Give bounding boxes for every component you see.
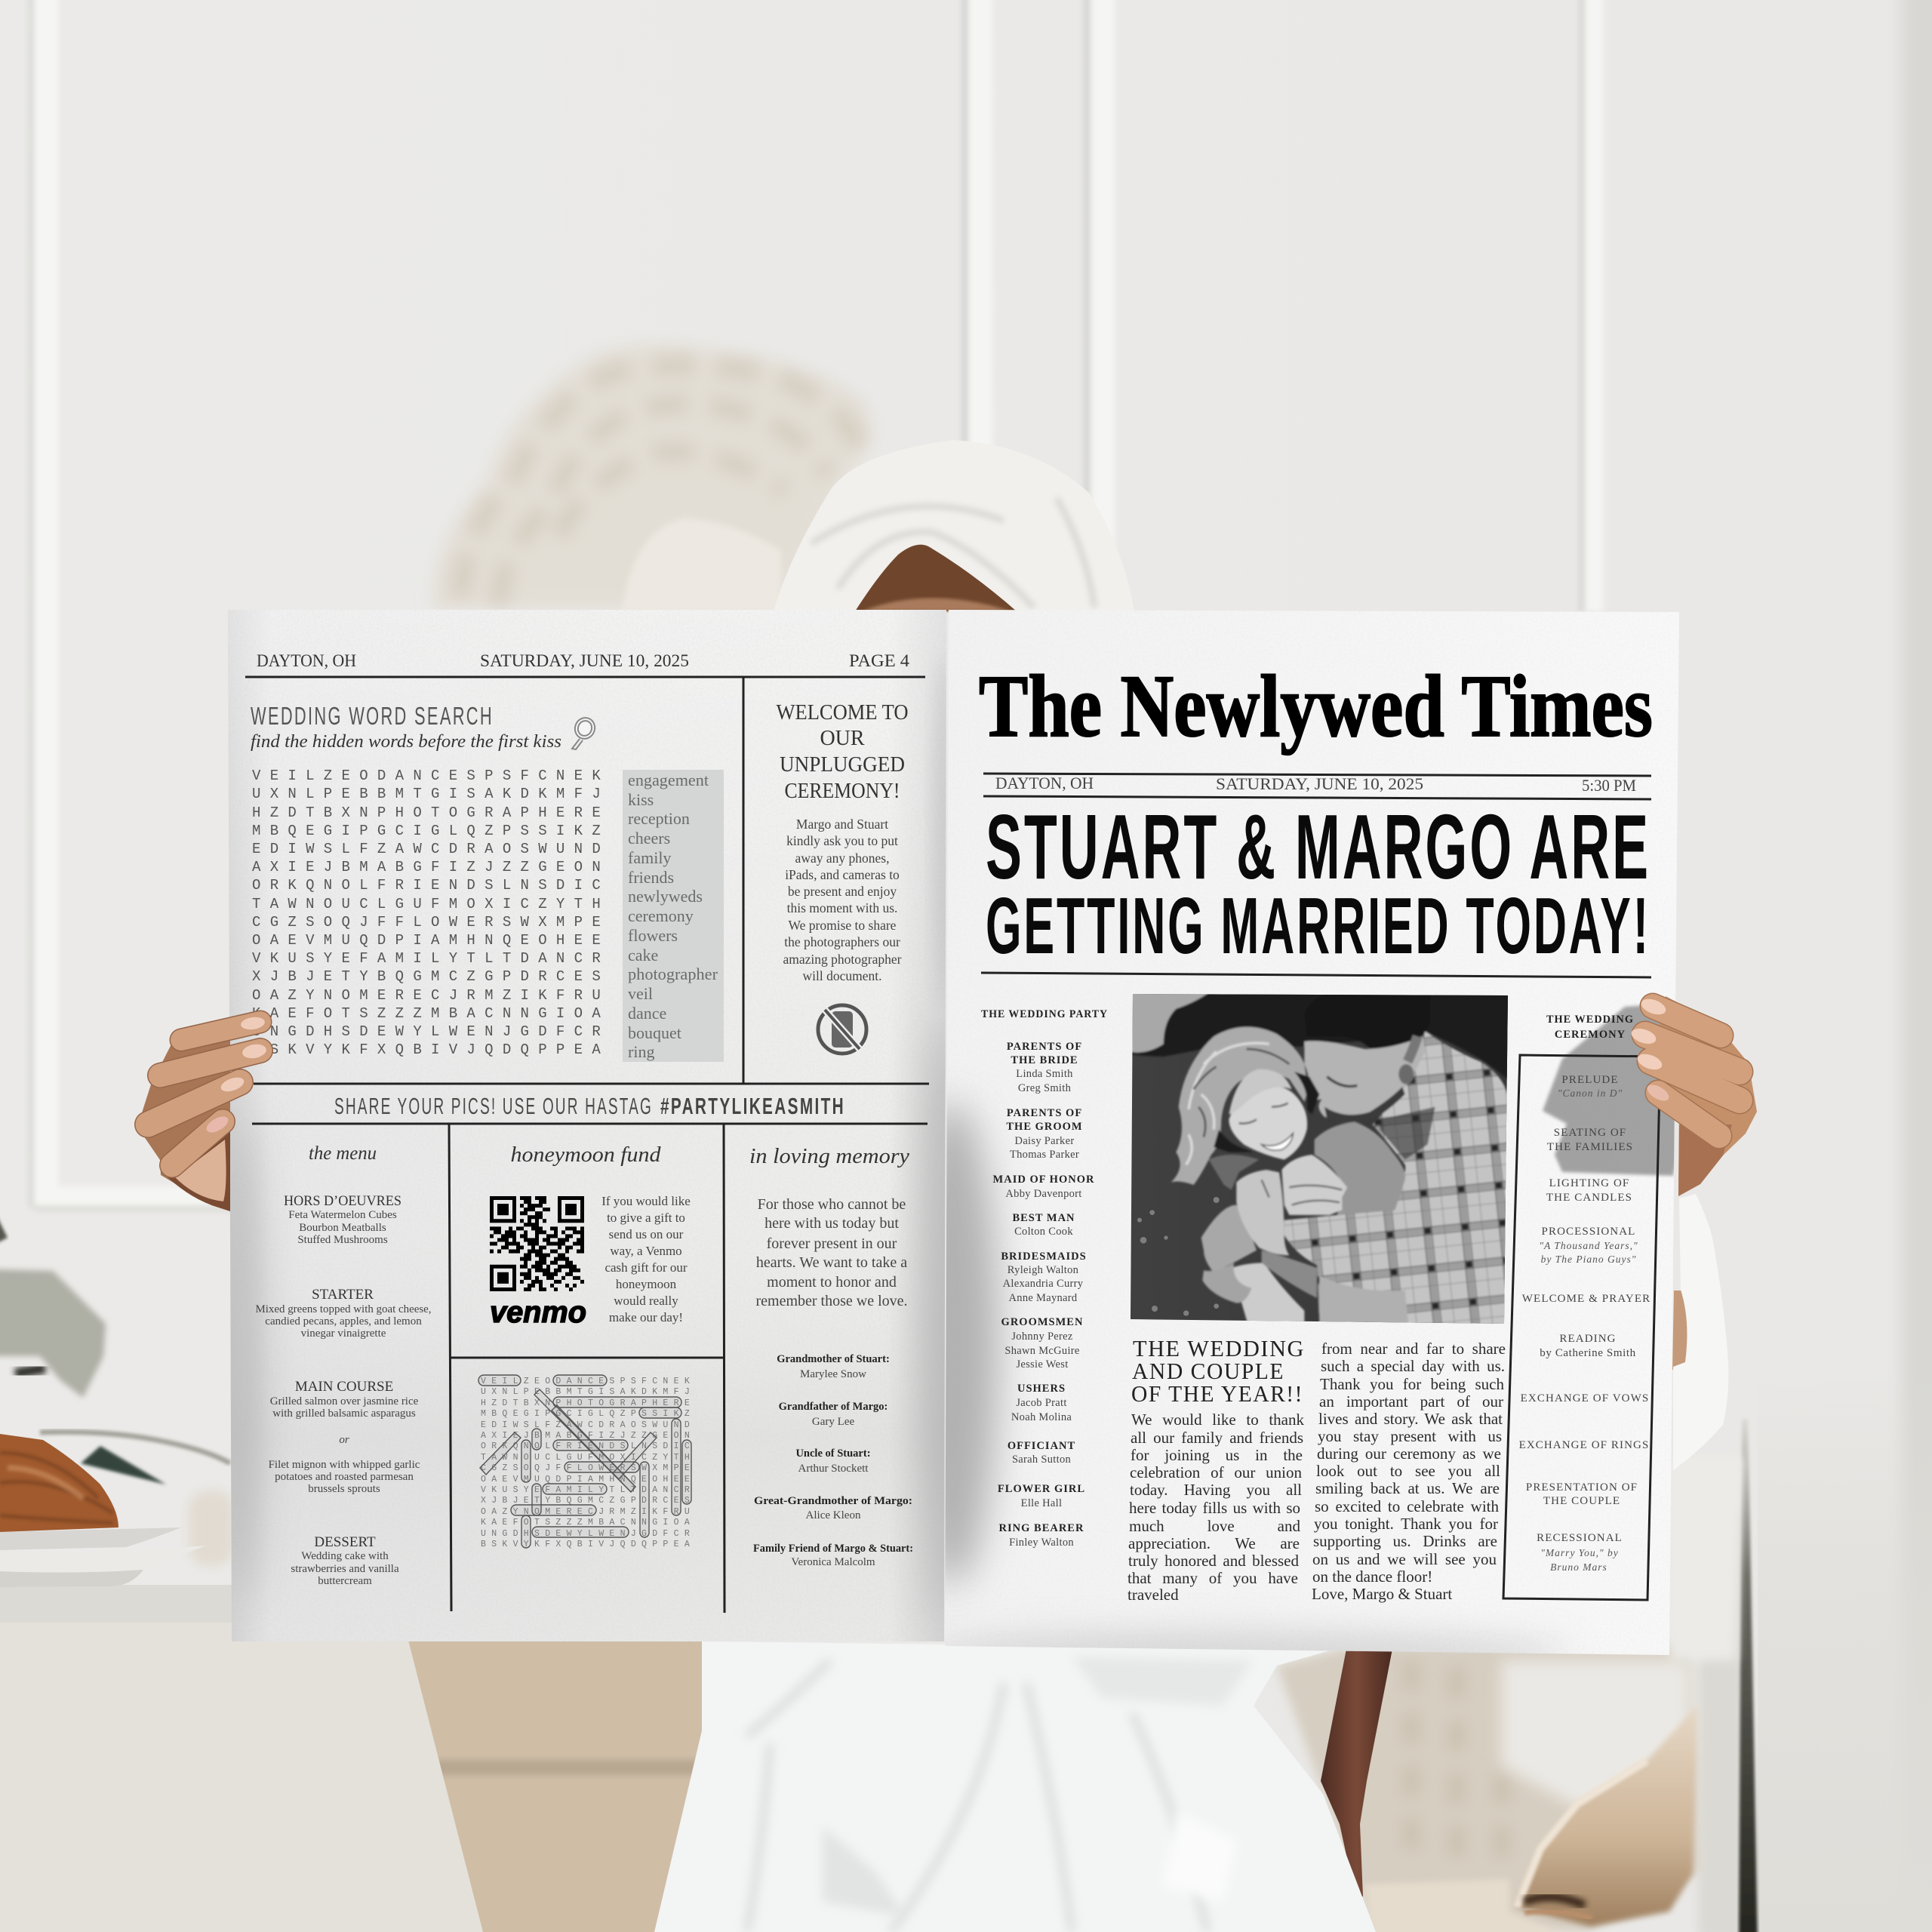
left page: rules <box>245 677 929 1613</box>
text: memory note: forever present in our <box>767 1235 897 1252</box>
article column one: that many of you have <box>1128 1569 1298 1587</box>
article column two: smiling back at us. We are <box>1315 1479 1500 1497</box>
panel: solved word search: HZDTBXNPHOTOGRAPHERE <box>481 1398 695 1408</box>
panel: the menu: Feta Watermelon Cubes <box>288 1209 397 1221</box>
panel: the wedding ceremony: THE WEDDING <box>1546 1014 1634 1026</box>
list: remembered family: Arthur Stockett <box>798 1463 869 1475</box>
icon: magnifying glass <box>572 715 598 749</box>
ceremony programme: "Marry You," by <box>1540 1547 1619 1558</box>
word search letter grid: XJBJETYBQGMCZGPDRCES <box>252 968 610 985</box>
panel: the wedding party: MAID OF HONOR <box>993 1174 1094 1186</box>
newspaper: right page <box>907 610 1683 1679</box>
article column one: for joining us in the <box>1131 1446 1303 1464</box>
panel: the wedding party: Daisy Parker <box>1015 1135 1074 1147</box>
hashtag banner: SHARE YOUR PICS! USE OUR HASTAG <box>334 1093 653 1119</box>
panel: the menu: Bourbon Meatballs <box>299 1222 386 1234</box>
ceremony programme: PRELUDE <box>1561 1074 1619 1086</box>
heading: unplugged ceremony: WELCOME TO <box>776 701 909 724</box>
text: honeymoon note: would really <box>614 1294 678 1308</box>
panel: unplugged ceremony <box>776 701 909 1054</box>
panel: the wedding party: BEST MAN <box>1012 1212 1075 1224</box>
word list <box>623 770 724 1062</box>
word list: family <box>628 848 671 867</box>
panel: wedding word search <box>251 702 724 1062</box>
panel: the wedding party: THE WEDDING PARTY <box>981 1008 1108 1020</box>
ceremony programme: by Catherine Smith <box>1540 1347 1636 1359</box>
background: beige wall under paper <box>392 1638 709 1932</box>
icon: no phones <box>818 1005 866 1054</box>
heading: unplugged ceremony: CEREMONY! <box>785 780 900 803</box>
panel: solved word search: UXNLPEBBMTGISAKDKMFJ <box>481 1387 695 1397</box>
photo: couple embracing <box>1128 989 1513 1328</box>
word search letter grid: OAZYNOMERECJRMZIKFRU <box>252 987 610 1004</box>
text: unplugged note: We promise to share <box>789 918 897 933</box>
panel: the wedding party: Abby Davenport <box>1005 1188 1082 1200</box>
word search letter grid: AXIEJBMABGFIZJZZGEON <box>252 859 610 875</box>
ceremony programme: RECESSIONAL <box>1537 1532 1623 1544</box>
panel: the wedding party: Greg Smith <box>1018 1082 1072 1094</box>
background: cup <box>189 1491 234 1566</box>
article heading <box>1131 1335 1305 1407</box>
word list: dance <box>628 1004 666 1023</box>
heading: unplugged ceremony: UNPLUGGED <box>780 753 905 777</box>
panel: the menu <box>255 1143 432 1587</box>
hashtag banner: #PARTYLIKEASMITH <box>660 1093 845 1119</box>
text: unplugged note <box>783 817 902 983</box>
panel: the wedding party: Linda Smith <box>1016 1068 1073 1080</box>
right sleeve and arm <box>1672 1194 1728 1470</box>
article column one <box>1128 1411 1304 1604</box>
article heading: AND COUPLE <box>1132 1358 1284 1384</box>
text: memory note: remember those we love. <box>755 1293 908 1309</box>
article column two: Thank you for being such <box>1320 1375 1504 1393</box>
ceremony programme: "A Thousand Years," <box>1539 1240 1638 1251</box>
word list: engagement <box>628 771 709 789</box>
ceremony programme: Bruno Mars <box>1550 1561 1607 1573</box>
panel: the wedding party: USHERS <box>1017 1383 1066 1395</box>
word list: veil <box>628 984 653 1003</box>
panel: the menu: Filet mignon with whipped garlic <box>269 1459 420 1471</box>
panel: honeymoon fund <box>490 1143 691 1329</box>
list: remembered family: Marylee Snow <box>800 1368 866 1380</box>
panel: the wedding party: Jessie West <box>1016 1358 1069 1371</box>
ceremony programme: THE FAMILIES <box>1547 1141 1633 1153</box>
panel: solved word search: VEILZEODANCESPSFCNEK <box>481 1377 695 1386</box>
article column two: you tonight. Thank you for <box>1314 1515 1498 1533</box>
panel: the wedding party <box>981 1008 1108 1549</box>
article column one: much love and <box>1129 1517 1300 1535</box>
article column two: look out to see you all <box>1316 1462 1500 1480</box>
text: memory note: here with us today but <box>764 1215 899 1232</box>
word list: photographer <box>628 964 718 983</box>
panel: the wedding ceremony <box>1503 1014 1660 1600</box>
text: memory note: moment to honor and <box>767 1274 897 1291</box>
panel: the menu: the menu <box>309 1143 377 1164</box>
panel: solved word search <box>478 1375 695 1549</box>
word search letter grid: VEILZEODANCESPSFCNEK <box>252 768 610 784</box>
panel: the menu: MAIN COURSE <box>295 1379 393 1395</box>
list: remembered family: Gary Lee <box>812 1416 854 1428</box>
panel: honeymoon fund: honeymoon fund <box>510 1143 662 1167</box>
article column one: today. Having you all <box>1130 1481 1302 1499</box>
article column two: lives and story. We ask that <box>1318 1410 1503 1428</box>
article column two: so excited to celebrate with <box>1315 1497 1499 1515</box>
background: fluffy chair <box>1277 1457 1743 1932</box>
article column one: We would like to thank <box>1131 1411 1304 1429</box>
panel: the menu: brussels sprouts <box>308 1483 380 1495</box>
text: unplugged note: iPads, and cameras to <box>785 867 900 882</box>
panel: the wedding party: PARENTS OF <box>1007 1107 1082 1119</box>
panel: solved word search: OAEVMUQDPIAMHNQEOHEE <box>481 1475 695 1484</box>
panel: the wedding party: Finley Walton <box>1009 1537 1074 1549</box>
ceremony frame <box>1503 1055 1660 1600</box>
venmo logo text: venmo <box>490 1296 586 1329</box>
word search letter grid: UXNLPEBBMTGISAKDKMFJ <box>252 786 610 802</box>
panel: the wedding party: Ryleigh Walton <box>1008 1264 1079 1276</box>
article column one: truly honored and blessed <box>1128 1552 1299 1570</box>
panel: the wedding party: Sarah Sutton <box>1012 1454 1071 1466</box>
word search letter grid: OAEVMUQDPIAMHNQEOHEE <box>252 932 610 949</box>
word search letter grid: HZDTBXNPHOTOGRAPHERE <box>252 804 610 821</box>
panel: solved word search: CGZSOQJFFLOWERSWXMPE <box>481 1463 695 1473</box>
text: memory note <box>755 1196 908 1309</box>
panel: solved word search: UNGDHSDEWYLWENJGDFCR <box>481 1529 695 1539</box>
article column two: Love, Margo & Stuart <box>1312 1585 1452 1603</box>
word search letter grid: VKUSYEFAMILYTLTDANCR <box>252 950 610 967</box>
panel: solved word search: VKUSYEFAMILYTLTDANCR <box>481 1485 695 1495</box>
qr code <box>490 1196 584 1291</box>
panel: solved word search: KAEFOTSZZZMBACNNGIOA <box>481 1518 695 1527</box>
icon: left hand holding paper <box>137 1016 267 1211</box>
list: remembered family <box>753 1353 913 1568</box>
list: remembered family: Grandmother of Stuart: <box>777 1353 890 1365</box>
ceremony programme: by The Piano Guys" <box>1541 1254 1636 1265</box>
article column two: supporting us. Drinks are <box>1313 1532 1497 1550</box>
word search letter grid: BSKVYKFXQBIVJQDQPPEA <box>252 1041 610 1058</box>
subtitle: word search: find the hidden words before the first kiss <box>251 732 561 752</box>
ceremony programme: PROCESSIONAL <box>1542 1226 1635 1238</box>
panel: the wedding party: BRIDESMAIDS <box>1001 1251 1087 1263</box>
text: honeymoon note: way, a Venmo <box>610 1244 682 1258</box>
word search letter grid: ORKQNOLFRIENDSLNSDIC <box>252 877 610 894</box>
panel: the menu: strawberries and vanilla <box>291 1563 399 1575</box>
panel: the menu: Wedding cake with <box>301 1550 389 1562</box>
word list: kiss <box>628 790 654 809</box>
list: remembered family: Veronica Malcolm <box>791 1556 875 1568</box>
text: unplugged note: kindly ask you to put <box>786 833 898 848</box>
article column two: during our ceremony as we <box>1317 1444 1501 1463</box>
list: remembered family: Grandfather of Margo: <box>779 1401 888 1413</box>
word list: friends <box>628 868 674 887</box>
panel: the menu: Grilled salmon over jasmine rice <box>270 1395 419 1407</box>
panel: solved word search: OAZYNOMERECJRMZIKFRU <box>481 1507 695 1517</box>
newspaper: left page <box>219 610 966 1641</box>
word list: ceremony <box>628 906 694 925</box>
article column one: here today fills us with so <box>1129 1499 1300 1517</box>
word search letter grid: UNGDHSDEWYLWENJGDFCR <box>252 1023 610 1040</box>
panel: the wedding party: PARENTS OF <box>1007 1041 1082 1053</box>
masthead: The Newlywed Times: The Newlywed Times <box>979 657 1653 755</box>
panel: the menu: with grilled balsamic asparagus <box>272 1407 416 1420</box>
panel: the wedding party: OFFICIANT <box>1008 1440 1075 1452</box>
panel: the menu: candied pecans, apples, and lemon <box>265 1315 422 1327</box>
panel: the wedding party: Shawn McGuire <box>1004 1345 1080 1357</box>
text: unplugged note: be present and enjoy <box>788 884 897 899</box>
ceremony programme: PRESENTATION OF <box>1526 1481 1638 1494</box>
ceremony programme: SEATING OF <box>1554 1127 1626 1139</box>
panel: the menu: DESSERT <box>314 1534 376 1550</box>
left page: date header: DAYTON, OH <box>257 651 356 670</box>
panel: the menu: vinegar vinaigrette <box>301 1327 386 1340</box>
panel: solved word search: BSKVYKFXQBIVJQDQPPEA <box>481 1540 695 1549</box>
person: bath robe <box>654 1641 1376 1932</box>
article column one: celebration of our union <box>1130 1463 1302 1481</box>
article column two: on us and we will see you <box>1312 1550 1497 1568</box>
article column two: on the dance floor! <box>1312 1567 1432 1586</box>
panel: the wedding party: Jacob Pratt <box>1016 1397 1067 1409</box>
word search letter grid: CGZSOQJFFLOWERSWXMPE <box>252 914 610 931</box>
word search letter grid: MBQEGIPGCIGLQZPSSIKZ <box>252 823 610 839</box>
background: blurred plant leaves <box>0 1208 230 1484</box>
answer highlight capsules <box>478 1375 691 1548</box>
article column two <box>1312 1340 1506 1603</box>
right page: date strip: 5:30 PM <box>1582 776 1636 795</box>
ceremony programme: "Canon in D" <box>1558 1088 1623 1099</box>
text: memory note: For those who cannot be <box>758 1196 906 1213</box>
list: remembered family: Uncle of Stuart: <box>795 1447 871 1460</box>
panel: the menu: Mixed greens topped with goat cheese, <box>255 1303 432 1315</box>
text: honeymoon note: to give a gift to <box>607 1211 685 1225</box>
background: table and cloth <box>0 1585 483 1932</box>
panel: the wedding party: Anne Maynard <box>1009 1292 1078 1304</box>
text: honeymoon note: send us on our <box>609 1227 684 1241</box>
panel: the menu: HORS D’OEUVRES <box>284 1193 401 1209</box>
main headline <box>986 795 1651 971</box>
text: unplugged note: the photographers our <box>784 934 900 949</box>
heading: unplugged ceremony <box>776 701 909 803</box>
panel: solved word search: TAWNOUCLGUFMOXICZYTH <box>481 1453 695 1463</box>
article heading: THE WEDDING <box>1133 1335 1305 1361</box>
text: honeymoon note: honeymoon <box>616 1277 677 1291</box>
ceremony programme: THE CANDLES <box>1546 1192 1632 1204</box>
ceremony programme: READING <box>1559 1333 1617 1345</box>
text: unplugged note: will document. <box>803 968 881 983</box>
panel: solved word search: AXIEJBMABGFIZJZZGEON <box>481 1431 695 1441</box>
panel: the wedding ceremony: CEREMONY <box>1555 1029 1626 1041</box>
panel: solved word search: EDIWSLFZAWCDRAOSWUND <box>481 1420 695 1430</box>
panel: solved word search: ORKQNOLFRIENDSLNSDIC <box>481 1441 695 1451</box>
panel: the wedding party: Alexandria Curry <box>1003 1278 1084 1290</box>
article column two: an important part of our <box>1319 1392 1503 1411</box>
right page: date strip: SATURDAY, JUNE 10, 2025 <box>1216 774 1423 793</box>
panel: solved word search: XJBJETYBQGMCZGPDRCES <box>481 1496 695 1506</box>
word list: cheers <box>628 829 670 848</box>
text: unplugged note: away any phones, <box>795 851 889 866</box>
article column one: appreciation. We are <box>1128 1534 1300 1552</box>
panel: the wedding party: GROOMSMEN <box>1001 1316 1083 1328</box>
word list: flowers <box>628 926 678 945</box>
panel: the menu: STARTER <box>312 1287 374 1303</box>
list: remembered family: Family Friend of Margo & Stuart: <box>753 1543 913 1555</box>
text: memory note: hearts. We want to take a <box>756 1254 907 1271</box>
ceremony programme: EXCHANGE OF RINGS <box>1519 1439 1649 1451</box>
heading: word search: WEDDING WORD SEARCH <box>251 702 494 730</box>
word list: reception <box>628 809 690 828</box>
word search letter grid: KAEFOTSZZZMBACNNGIOA <box>252 1005 610 1022</box>
text: honeymoon note <box>601 1194 691 1324</box>
article column two: you stay present with us <box>1318 1427 1502 1445</box>
ceremony programme: LIGHTING OF <box>1549 1177 1629 1189</box>
panel: the wedding party: Colton Cook <box>1014 1226 1073 1238</box>
panel: the wedding party: THE GROOM <box>1006 1121 1083 1133</box>
panel: the wedding party: FLOWER GIRL <box>998 1483 1085 1495</box>
panel: the menu: buttercream <box>318 1575 372 1587</box>
right page: date strip <box>983 774 1651 799</box>
panel: solved word search: MBQEGIPGCIGLQZPSSIKZ <box>481 1409 695 1419</box>
article column one: traveled <box>1128 1586 1179 1604</box>
article column two: such a special day with us. <box>1321 1357 1505 1375</box>
background: plates and croissant <box>0 1434 206 1587</box>
right page: date strip: DAYTON, OH <box>995 774 1094 792</box>
panel: the menu: or <box>339 1434 349 1446</box>
word list: ring <box>628 1042 654 1061</box>
list: remembered family: Great-Grandmother of Margo: <box>754 1495 912 1507</box>
article column one: all our family and friends <box>1131 1429 1303 1447</box>
word list: bouquet <box>628 1023 681 1042</box>
word list: cake <box>628 946 658 964</box>
ceremony programme: WELCOME & PRAYER <box>1522 1293 1651 1305</box>
panel: the wedding party: Noah Molina <box>1011 1411 1072 1423</box>
panel: the wedding party: Thomas Parker <box>1010 1149 1079 1161</box>
person: towel and hair <box>774 440 1134 611</box>
panel: the wedding party: RING BEARER <box>999 1522 1084 1534</box>
text: unplugged note: Margo and Stuart <box>796 817 888 832</box>
word search letter grid: EDIWSLFZAWCDRAOSWUND <box>252 841 610 857</box>
ceremony programme <box>1519 1074 1651 1573</box>
article heading: OF THE YEAR!! <box>1131 1380 1303 1407</box>
chair wooden leg <box>1321 1649 1392 1897</box>
word search letter grid <box>252 768 610 1058</box>
ceremony programme: THE COUPLE <box>1543 1495 1620 1507</box>
panel: the wedding party: Elle Hall <box>1021 1497 1062 1509</box>
word search letter grid: TAWNOUCLGUFMOXICZYTH <box>252 896 610 912</box>
list: remembered family: Alice Kleon <box>806 1509 861 1521</box>
left page: date header: PAGE 4 <box>849 651 910 670</box>
left page: date header: SATURDAY, JUNE 10, 2025 <box>480 651 689 670</box>
left page: date header <box>257 651 910 670</box>
word list: newlyweds <box>628 887 703 906</box>
text: honeymoon note: If you would like <box>601 1194 691 1208</box>
article column two: from near and far to share <box>1321 1340 1506 1358</box>
text: unplugged note: this moment with us. <box>787 900 897 915</box>
text: honeymoon note: cash gift for our <box>605 1260 688 1275</box>
ceremony programme: EXCHANGE OF VOWS <box>1521 1392 1649 1404</box>
panel: the menu: Stuffed Mushrooms <box>297 1234 388 1246</box>
heading: unplugged ceremony: OUR <box>820 727 865 750</box>
panel: the wedding party: Johnny Perez <box>1011 1331 1073 1343</box>
macrame wall hanging <box>434 343 872 611</box>
background: right wall column <box>1698 1358 1932 1932</box>
panel: the menu: potatoes and roasted parmesan <box>275 1471 414 1483</box>
panel: in loving memory <box>749 1144 913 1568</box>
icon: right hand holding paper <box>1629 996 1757 1196</box>
text: unplugged note: amazing photographer <box>783 952 902 967</box>
panel: the wedding party: THE BRIDE <box>1011 1054 1078 1066</box>
panel: in loving memory: in loving memory <box>749 1144 909 1168</box>
text: honeymoon note: make our day! <box>609 1310 683 1324</box>
